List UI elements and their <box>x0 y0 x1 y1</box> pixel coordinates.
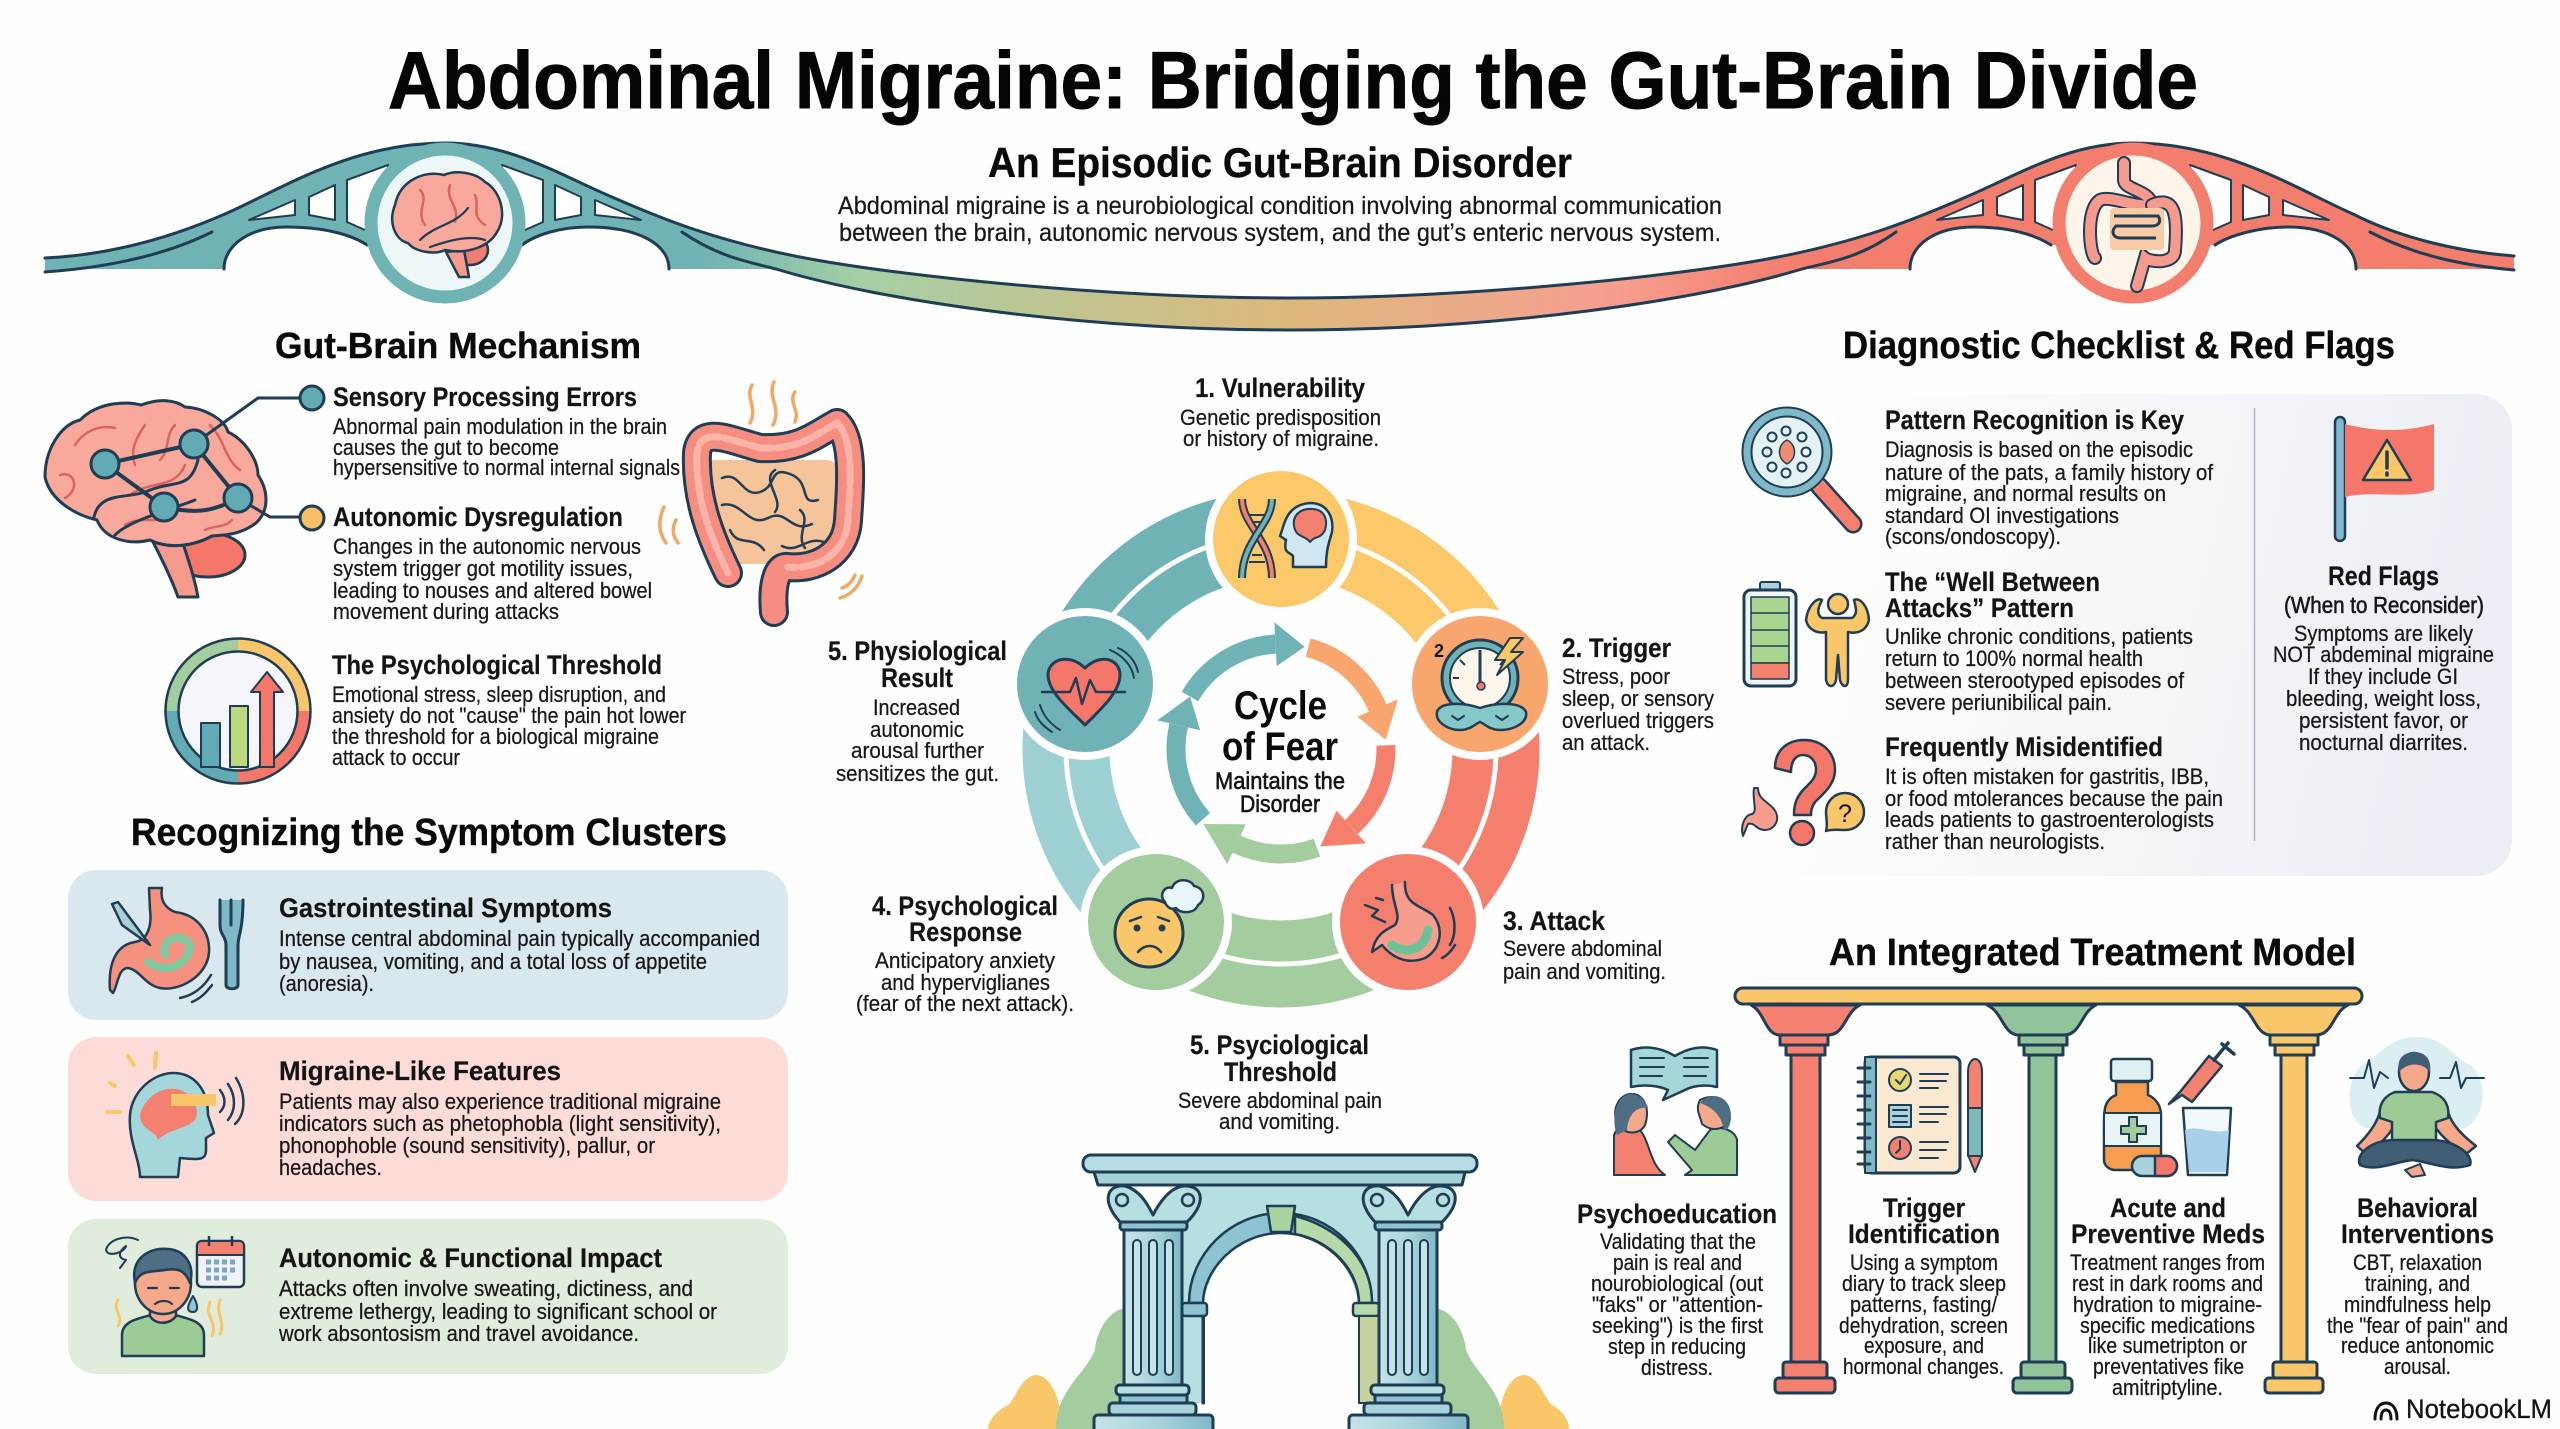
label 4 <box>856 891 1074 1016</box>
text: well between attacks: Unlike chronic conditions, patients <box>1885 624 2193 649</box>
text: behavioral interventions: reduce antonomic <box>2341 1333 2494 1358</box>
node 2: trigger <box>1404 608 1556 760</box>
text: acute and preventive meds: specific medications <box>2080 1313 2255 1338</box>
text: psychoeducation: "faks" or "attention- <box>1592 1292 1763 1317</box>
intro text: Abdominal migraine is a neurobiological condition involving abnormal communication <box>838 192 1722 220</box>
icon: stomach, knife and fork <box>110 888 243 1002</box>
text: psychoeducation <box>1577 1199 1777 1380</box>
text: behavioral interventions: arousal. <box>2384 1354 2451 1379</box>
icon: meditating person <box>2350 1037 2484 1177</box>
label: psyciological threshold <box>1178 1030 1382 1134</box>
label 2: Stress, poor <box>1562 664 1670 689</box>
text: psychological threshold: the threshold for a biological migraine <box>332 724 659 749</box>
text: gastrointestinal: (anoresia). <box>279 971 374 996</box>
label 5: Result <box>881 663 953 693</box>
label 2: an attack. <box>1562 730 1650 755</box>
label 1: Genetic predisposition <box>1180 405 1381 430</box>
center label: of Fear <box>1222 725 1338 769</box>
text: acute and preventive meds: preventatives fike <box>2093 1354 2244 1379</box>
icon: conversation with book <box>1614 1048 1737 1175</box>
ring segments <box>1066 534 1496 964</box>
card: gastrointestinal <box>68 870 788 1020</box>
label: psyciological threshold: Severe abdominal pain <box>1178 1088 1382 1113</box>
text: red flags: Red Flags <box>2328 561 2439 591</box>
text: psychoeducation: step in reducing <box>1608 1334 1746 1359</box>
icon: gauge, lightning and sleep mask <box>1434 638 1526 730</box>
heading: Gut-Brain Mechanism <box>275 325 641 366</box>
node 4: psychological response <box>1080 846 1232 998</box>
heading: Recognizing the Symptom Clusters <box>131 812 727 854</box>
text: sensory processing errors: Sensory Processing Errors <box>333 382 637 412</box>
card: autonomic <box>68 1219 788 1374</box>
icon: question mark and stomach <box>1742 740 1864 845</box>
text: psychological threshold: The Psychological Threshold <box>332 650 662 680</box>
text: psychoeducation: distress. <box>1641 1355 1713 1380</box>
panel: diagnostic checklist and red flags <box>1742 325 2512 876</box>
text: trigger identification: Trigger <box>1883 1193 1965 1223</box>
label 4: and hyperviglianes <box>881 970 1050 995</box>
illustration: stone arch with bushes <box>988 1155 1569 1429</box>
text: behavioral interventions: CBT, relaxation <box>2353 1250 2482 1275</box>
card: migraine-like <box>68 1037 788 1201</box>
bridge illustration <box>45 143 2514 330</box>
text: autonomic dysregulation <box>333 502 652 624</box>
text: pattern recognition: nature of the pats, a family history of <box>1885 460 2214 485</box>
label 5: 5. Physiological <box>828 636 1007 666</box>
text: psychological threshold <box>332 650 686 770</box>
label 5: autonomic <box>870 717 964 742</box>
text: psychoeducation: Psychoeducation <box>1577 1199 1777 1229</box>
text: acute and preventive meds: Acute and <box>2110 1193 2226 1223</box>
text: sensory processing errors: hypersensitive to normal internal signals <box>333 455 680 480</box>
label: psyciological threshold: Threshold <box>1224 1057 1337 1087</box>
text: psychological threshold: ansiety do not "cause" the pain hot lower <box>332 703 686 728</box>
center label: Disorder <box>1240 791 1320 818</box>
label 5: sensitizes the gut. <box>836 761 999 786</box>
text: trigger identification: Using a symptom <box>1850 1250 1998 1275</box>
label 2: sleep, or sensory <box>1562 686 1714 711</box>
text: well between attacks: return to 100% normal health <box>1885 646 2143 671</box>
text: red flags: persistent favor, or <box>2299 708 2468 733</box>
label 2: 2. Trigger <box>1562 633 1671 663</box>
intro text: between the brain, autonomic nervous system, and the gut’s enteric nervous system. <box>839 219 1721 247</box>
label 4: (fear of the next attack). <box>856 991 1074 1016</box>
text: well between attacks: severe periunibilical pain. <box>1885 690 2112 715</box>
text: migraine-like: Patients may also experience traditional migraine <box>279 1089 721 1114</box>
text: migraine-like: headaches. <box>279 1155 382 1180</box>
icon: battery and strong figure <box>1744 582 1869 686</box>
text: psychoeducation: Validating that the <box>1600 1229 1756 1254</box>
text: frequently misidentified: rather than neurologists. <box>1885 829 2105 854</box>
text: well between attacks: Attacks” Pattern <box>1885 593 2074 623</box>
text: frequently misidentified: Frequently Misidentified <box>1885 732 2163 762</box>
text: migraine-like: Migraine-Like Features <box>279 1056 561 1086</box>
text: psychoeducation: nourobiological (out <box>1591 1271 1763 1296</box>
title: Abdominal Migraine: Bridging the Gut-Brain Divide <box>388 36 2198 126</box>
text: autonomic dysregulation: Changes in the autonomic nervous <box>333 534 641 559</box>
icon: intestines with heat waves <box>660 382 862 612</box>
text: trigger identification: exposure, and <box>1864 1333 1984 1358</box>
text: psychological threshold: Emotional stress, sleep disruption, and <box>332 682 666 707</box>
text: sensory processing errors: Abnormal pain modulation in the brain <box>333 414 667 439</box>
text: gastrointestinal: Gastrointestinal Symptoms <box>279 893 612 923</box>
text: trigger identification: patterns, fasting/ <box>1850 1292 1998 1317</box>
text: autonomic: Attacks often involve sweating, dictiness, and <box>279 1276 693 1301</box>
label 1 <box>1180 373 1381 451</box>
text: acute and preventive meds: rest in dark rooms and <box>2072 1271 2263 1296</box>
text: acute and preventive meds: Preventive Meds <box>2071 1219 2265 1249</box>
text: autonomic: work absontosism and travel avoidance. <box>278 1321 639 1346</box>
text: autonomic dysregulation: leading to nouses and altered bowel <box>333 578 652 603</box>
text: gastrointestinal <box>279 893 760 996</box>
text: sensory processing errors: causes the gut to become <box>333 435 559 460</box>
icon: threshold gauge <box>166 638 310 784</box>
notebooklm logo: NotebookLM <box>2406 1394 2552 1424</box>
node 1: vulnerability <box>1205 463 1357 615</box>
center label: Cycle <box>1234 684 1327 728</box>
connector dot: sensory <box>300 386 324 410</box>
text: acute and preventive meds: like sumetripton or <box>2088 1333 2247 1358</box>
text: psychoeducation: pain is real and <box>1613 1250 1742 1275</box>
label 3: Severe abdominal <box>1503 936 1662 961</box>
text: autonomic dysregulation: Autonomic Dysregulation <box>333 502 623 532</box>
text: red flags: (When to Reconsider) <box>2284 592 2484 618</box>
label 5 <box>828 636 1007 786</box>
text: well between attacks: between sterootyped episodes of <box>1885 668 2185 693</box>
icon: brain medallion <box>371 149 519 297</box>
text: red flags: Symptoms are likely <box>2294 621 2473 646</box>
icon: gauge, lightning and sleep mask: 2 <box>1434 641 1444 661</box>
text: behavioral interventions: Interventions <box>2341 1219 2494 1249</box>
text: red flags <box>2273 561 2494 755</box>
text: pattern recognition: Pattern Recognition is Key <box>1885 405 2184 435</box>
label 5: Increased <box>873 695 960 720</box>
label 5: arousal further <box>851 738 984 763</box>
text: trigger identification: Identification <box>1848 1219 2000 1249</box>
text: pattern recognition: (scons/ondoscopy). <box>1885 524 2061 549</box>
text: pattern recognition: migraine, and normal results on <box>1885 481 2166 506</box>
heading: An Integrated Treatment Model <box>1829 932 2356 974</box>
label: psyciological threshold: 5. Psyciological <box>1190 1030 1369 1060</box>
text: well between attacks <box>1885 567 2193 715</box>
text: trigger identification: diary to track sleep <box>1842 1271 2006 1296</box>
text: autonomic dysregulation: movement during attacks <box>333 599 559 624</box>
text: behavioral interventions <box>2327 1193 2508 1379</box>
text: migraine-like: phonophoble (sound sensitivity), pallur, or <box>279 1133 655 1158</box>
text: behavioral interventions: training, and <box>2365 1271 2470 1296</box>
text: well between attacks: The “Well Between <box>1885 567 2100 597</box>
text: psychoeducation: seeking") is the first <box>1592 1313 1763 1338</box>
label 3: pain and vomiting. <box>1503 959 1666 984</box>
text: psychological threshold: attack to occur <box>332 745 460 770</box>
icon: question mark and stomach: ? <box>1838 800 1852 828</box>
text: pattern recognition: Diagnosis is based on the episodic <box>1885 437 2193 462</box>
label 4: Response <box>909 917 1022 947</box>
text: autonomic dysregulation: system trigger got motility issues, <box>333 556 633 581</box>
text: red flags: If they include GI <box>2308 664 2458 689</box>
icon: DNA and head <box>1242 499 1332 578</box>
text: frequently misidentified: leads patients to gastroenterologists <box>1885 807 2214 832</box>
panel: integrated treatment model <box>1577 932 2508 1400</box>
heading: Diagnostic Checklist & Red Flags <box>1843 325 2395 367</box>
icon: intestine medallion <box>2059 149 2207 297</box>
icon: cramping stomach <box>1365 882 1455 961</box>
node 5: physiological result <box>1009 608 1161 760</box>
icon: brain with network nodes <box>45 398 312 597</box>
icon: heart with ECG <box>1035 648 1138 732</box>
text: gastrointestinal: by nausea, vomiting, and a total loss of appetite <box>279 949 707 974</box>
icon: head with light and sound <box>107 1053 243 1177</box>
panel background <box>1770 394 2512 876</box>
connector dot: autonomic <box>300 506 324 530</box>
column: left <box>1094 1186 1213 1429</box>
icon: medicine bottle, pill, syringe and water <box>2104 1043 2234 1176</box>
label 1: 1. Vulnerability <box>1195 373 1365 403</box>
text: trigger identification: hormonal changes. <box>1843 1354 2004 1379</box>
inner arrows <box>1157 622 1398 864</box>
text: behavioral interventions: the "fear of pain" and <box>2327 1313 2508 1338</box>
text: trigger identification <box>1839 1193 2008 1379</box>
text: gastrointestinal: Intense central abdominal pain typically accompanied <box>279 926 760 951</box>
center label: Maintains the <box>1215 768 1345 795</box>
label 2: overlued triggers <box>1562 708 1714 733</box>
center label <box>1215 684 1345 818</box>
text: autonomic: Autonomic & Functional Impact <box>279 1243 662 1273</box>
label 2 <box>1562 633 1714 755</box>
text: acute and preventive meds: hydration to migraine- <box>2073 1292 2262 1317</box>
panel: symptom clusters <box>68 812 788 1374</box>
icon: tired person and calendar <box>106 1236 244 1356</box>
icon: notebook and pen <box>1858 1057 1982 1173</box>
heading: episodic disorder: An Episodic Gut-Brain Disorder <box>988 139 1572 186</box>
node 3: attack <box>1332 846 1484 998</box>
label 4: 4. Psychological <box>872 891 1058 921</box>
text: autonomic <box>278 1243 717 1346</box>
text: acute and preventive meds <box>2070 1193 2265 1400</box>
text: red flags: NOT abdeminal migraine <box>2273 642 2494 667</box>
text: pattern recognition <box>1885 405 2214 549</box>
text: acute and preventive meds: amitriptyline. <box>2112 1375 2223 1400</box>
text: frequently misidentified <box>1885 732 2223 854</box>
text: behavioral interventions: mindfulness help <box>2344 1292 2491 1317</box>
label 3 <box>1503 906 1666 984</box>
text: trigger identification: dehydration, screen <box>1839 1313 2008 1338</box>
panel: cycle of fear <box>828 373 1714 1016</box>
text: sensory processing errors <box>333 382 680 480</box>
text: autonomic: extreme lethergy, leading to significant school or <box>279 1299 717 1324</box>
column: right <box>1349 1186 1468 1429</box>
intro text <box>838 192 1722 247</box>
temple pillars <box>1735 988 2362 1393</box>
panel: gut-brain mechanism <box>45 325 862 784</box>
label 1: or history of migraine. <box>1183 426 1379 451</box>
icon: red flag <box>2335 417 2434 541</box>
icon: worried face with thought cloud <box>1115 880 1203 967</box>
text: migraine-like: indicators such as phetophobla (light sensitivity), <box>279 1111 721 1136</box>
text: red flags: bleeding, weight loss, <box>2286 686 2481 711</box>
text: pattern recognition: standard OI investigations <box>1885 503 2119 528</box>
text: behavioral interventions: Behavioral <box>2357 1193 2478 1223</box>
text: red flags: nocturnal diarrites. <box>2299 730 2468 755</box>
text: acute and preventive meds: Treatment ranges from <box>2070 1250 2265 1275</box>
text: frequently misidentified: or food mtolerances because the pain <box>1885 786 2223 811</box>
label 3: 3. Attack <box>1503 906 1606 936</box>
text: frequently misidentified: It is often mistaken for gastritis, IBB, <box>1885 764 2209 789</box>
label: psyciological threshold: and vomiting. <box>1219 1109 1340 1134</box>
label 4: Anticipatory anxiety <box>875 948 1055 973</box>
text: migraine-like <box>279 1056 721 1180</box>
icon: magnifying glass <box>1747 412 1853 524</box>
